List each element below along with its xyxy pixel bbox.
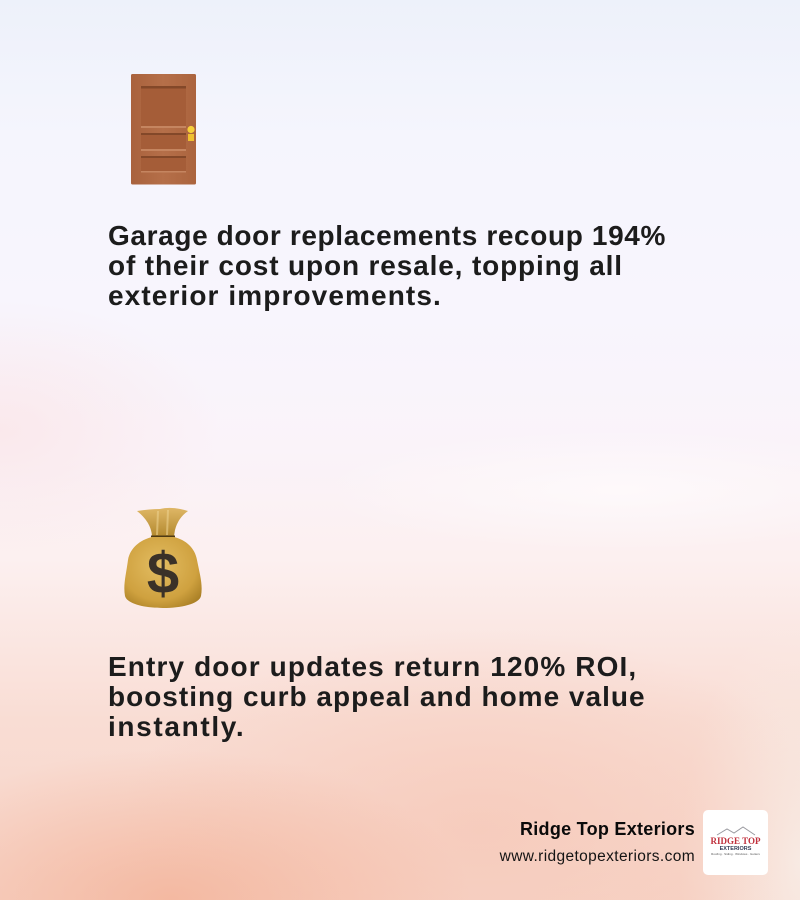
logo card: Roofing · Siding · Windows · Gutters	[711, 852, 760, 856]
icon: money bag: $	[147, 541, 179, 606]
stat text: entry door: boosting curb appeal and home value	[108, 681, 646, 712]
stat text: entry door: instantly.	[108, 711, 245, 742]
stat text: entry door	[108, 651, 646, 742]
website url: www.ridgetopexteriors.com	[500, 848, 695, 865]
logo card: RIDGE TOP	[711, 836, 761, 846]
logo card: EXTERIORS	[720, 846, 752, 852]
brand name: Ridge Top Exteriors	[520, 819, 695, 839]
icon: door	[131, 74, 196, 184]
logo card	[703, 810, 768, 875]
stat text: garage door	[108, 220, 666, 311]
stat text: garage door: exterior improvements.	[108, 280, 442, 311]
stat text: garage door: Garage door replacements recoup 194%	[108, 220, 666, 251]
stat text: garage door: of their cost upon resale, topping all	[108, 250, 623, 281]
stat text: entry door: Entry door updates return 120% ROI,	[108, 651, 637, 682]
icon: money bag	[124, 508, 202, 608]
